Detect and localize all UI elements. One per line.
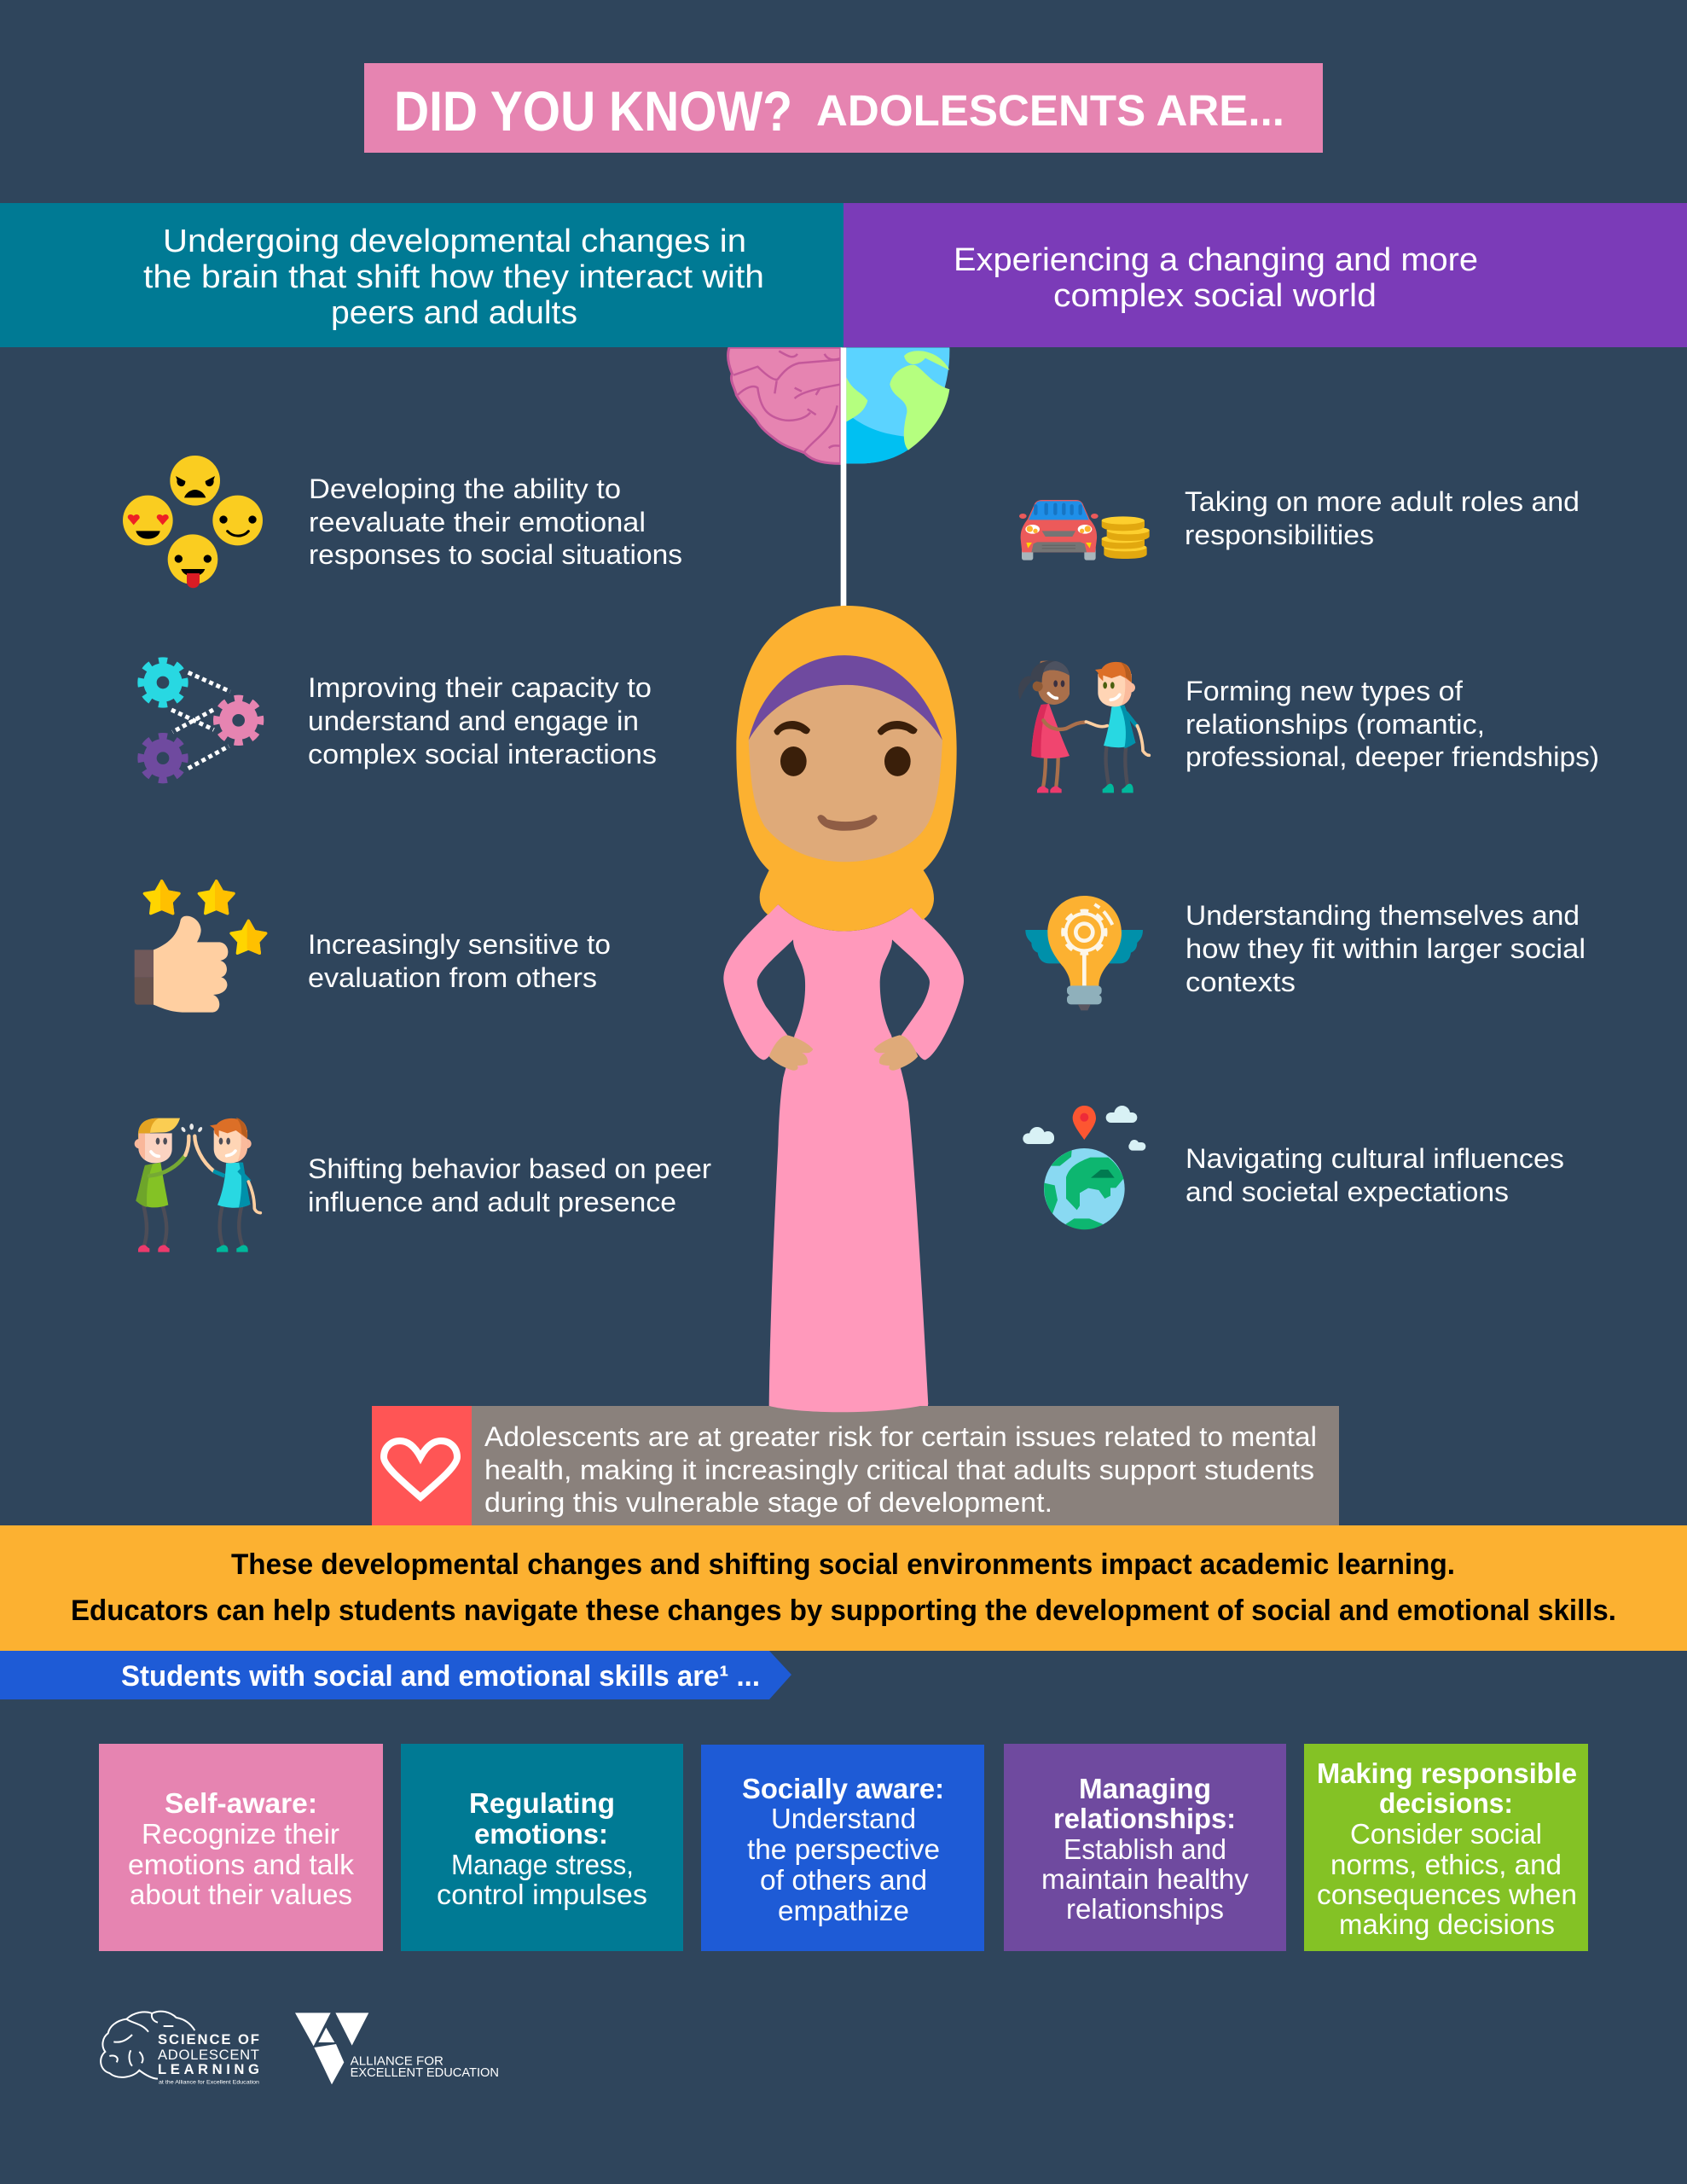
text: adult roles: responsibilities bbox=[1185, 520, 1374, 550]
icon: car and coins bbox=[1019, 500, 1150, 561]
panel: regulating emotions: Manage stress, bbox=[451, 1849, 634, 1880]
panel: socially aware: the perspective bbox=[747, 1833, 940, 1865]
panel: academic learning banner: These developmental changes and shifting social environments impact academic learning. bbox=[231, 1548, 1455, 1581]
text: new relationships: professional, deeper friendships) bbox=[1186, 741, 1599, 772]
panel: responsible decisions: consequences when bbox=[1317, 1879, 1577, 1910]
callout: mental health bbox=[372, 1404, 1339, 1525]
panel: right header band: complex social world bbox=[1053, 278, 1377, 314]
icon: two teens shaking hands bbox=[1018, 660, 1149, 793]
panel: self-aware: Recognize their bbox=[142, 1818, 339, 1850]
text: emotional responses: reevaluate their emotional bbox=[309, 507, 646, 537]
panel: self-aware: about their values bbox=[130, 1879, 352, 1910]
panel: self-aware: emotions and talk bbox=[128, 1849, 355, 1880]
icon: brain and globe on stalk bbox=[728, 347, 949, 609]
logo: Science of Adolescent Learning: ADOLESCENT bbox=[158, 2047, 259, 2063]
text: evaluation: Increasingly sensitive to bbox=[308, 929, 611, 960]
panel: regulating emotions: control impulses bbox=[437, 1879, 647, 1910]
icon: connected gears bbox=[141, 660, 261, 781]
panel: left header band: peers and adults bbox=[331, 295, 577, 331]
icon: two teens high five bbox=[135, 1118, 260, 1252]
text: evaluation bbox=[308, 929, 611, 993]
text: emotional responses: responses to social situations bbox=[309, 539, 682, 570]
text: peer influence: Shifting behavior based on peer bbox=[308, 1153, 711, 1184]
logo: Science of Adolescent Learning: SCIENCE OF bbox=[158, 2031, 259, 2048]
text: cultural influences: Navigating cultural influences bbox=[1186, 1143, 1564, 1174]
panel: left header band bbox=[0, 203, 844, 347]
panel: self-aware: Self-aware: bbox=[165, 1787, 317, 1819]
text: peer influence bbox=[308, 1153, 711, 1217]
icon: winged light bulb bbox=[1025, 896, 1143, 1010]
callout: mental health: during this vulnerable stage of development. bbox=[484, 1487, 1052, 1518]
central figure: girl in headscarf bbox=[723, 606, 964, 1413]
panel: managing relationships: relationships bbox=[1066, 1893, 1224, 1925]
panel: regulating emotions bbox=[401, 1744, 683, 1951]
panel: academic learning banner bbox=[0, 1525, 1687, 1651]
logo: Science of Adolescent Learning bbox=[101, 2012, 259, 2085]
panel: managing relationships: relationships: bbox=[1053, 1803, 1236, 1834]
panel: responsible decisions bbox=[1304, 1744, 1588, 1951]
panel: socially aware: Socially aware: bbox=[742, 1773, 944, 1804]
logo: Alliance for Excellent Education: EXCELLENT EDUCATION bbox=[351, 2066, 499, 2080]
panel: managing relationships bbox=[1004, 1744, 1286, 1951]
logo: Science of Adolescent Learning: at the Alliance for Excellent Education bbox=[159, 2079, 259, 2085]
text: social interactions: Improving their capacity to bbox=[308, 672, 652, 703]
panel: academic learning banner: Educators can help students navigate these changes by supporting the development of social and emotional skills. bbox=[71, 1594, 1616, 1627]
text: peer influence: influence and adult presence bbox=[308, 1187, 676, 1217]
title bbox=[364, 63, 1323, 153]
icon: four emoji faces bbox=[123, 456, 263, 588]
text: cultural influences: and societal expectations bbox=[1186, 1176, 1509, 1207]
text: social interactions: complex social interactions bbox=[308, 739, 657, 770]
text: cultural influences bbox=[1186, 1143, 1564, 1207]
panel: managing relationships: maintain healthy bbox=[1041, 1863, 1249, 1895]
panel: right header band bbox=[844, 203, 1687, 347]
text: social interactions bbox=[308, 672, 657, 770]
panel: responsible decisions: Making responsible bbox=[1317, 1757, 1577, 1789]
panel: socially aware: empathize bbox=[778, 1895, 909, 1926]
text: emotional responses: Developing the ability to bbox=[309, 473, 621, 504]
text: adult roles: Taking on more adult roles and bbox=[1185, 486, 1580, 517]
text: emotional responses bbox=[309, 473, 682, 570]
text: social contexts bbox=[1186, 900, 1586, 997]
icon: thumbs up with stars bbox=[135, 881, 266, 1013]
panel: responsible decisions: norms, ethics, and bbox=[1330, 1849, 1562, 1880]
callout: mental health: health, making it increasingly critical that adults support students bbox=[484, 1455, 1314, 1485]
callout: mental health: Adolescents are at greater risk for certain issues related to mental bbox=[484, 1421, 1317, 1452]
panel: left header band: Undergoing developmental changes in bbox=[163, 224, 746, 259]
panel: socially aware: of others and bbox=[760, 1864, 927, 1896]
arrow: students heading bbox=[0, 1651, 791, 1699]
panel: right header band: Experiencing a changing and more bbox=[954, 242, 1478, 278]
panel: responsible decisions: making decisions bbox=[1339, 1908, 1555, 1940]
arrow: students heading: Students with social and emotional skills are¹ ... bbox=[121, 1660, 760, 1693]
text: new relationships bbox=[1186, 676, 1599, 772]
icon: globe with pin and clouds bbox=[1023, 1106, 1145, 1229]
panel: left header band: the brain that shift how they interact with bbox=[143, 259, 764, 295]
text: new relationships: relationships (romantic, bbox=[1186, 709, 1485, 740]
text: social interactions: understand and engage in bbox=[308, 706, 639, 736]
text: social contexts: how they fit within larger social bbox=[1186, 933, 1586, 964]
text: evaluation: evaluation from others bbox=[308, 962, 597, 993]
panel: self-aware bbox=[99, 1744, 383, 1951]
logo: Science of Adolescent Learning: LEARNING bbox=[158, 2061, 259, 2077]
panel: managing relationships: Establish and bbox=[1064, 1833, 1226, 1865]
title: DID YOU KNOW? bbox=[394, 79, 792, 142]
logo: Alliance for Excellent Education bbox=[295, 2013, 499, 2084]
panel: responsible decisions: decisions: bbox=[1379, 1787, 1513, 1819]
text: new relationships: Forming new types of bbox=[1186, 676, 1463, 706]
panel: regulating emotions: emotions: bbox=[474, 1818, 608, 1850]
panel: responsible decisions: Consider social bbox=[1350, 1818, 1542, 1850]
logo: Alliance for Excellent Education: ALLIANCE FOR bbox=[351, 2055, 443, 2069]
panel: regulating emotions: Regulating bbox=[469, 1787, 615, 1819]
panel: socially aware bbox=[701, 1745, 984, 1951]
text: social contexts: Understanding themselves and bbox=[1186, 900, 1580, 931]
text: adult roles bbox=[1185, 486, 1580, 550]
panel: socially aware: Understand bbox=[771, 1803, 916, 1834]
icon: heart bbox=[372, 1406, 472, 1525]
text: social contexts: contexts bbox=[1186, 967, 1296, 997]
panel: managing relationships: Managing bbox=[1079, 1773, 1211, 1804]
title: ADOLESCENTS ARE... bbox=[816, 86, 1284, 135]
